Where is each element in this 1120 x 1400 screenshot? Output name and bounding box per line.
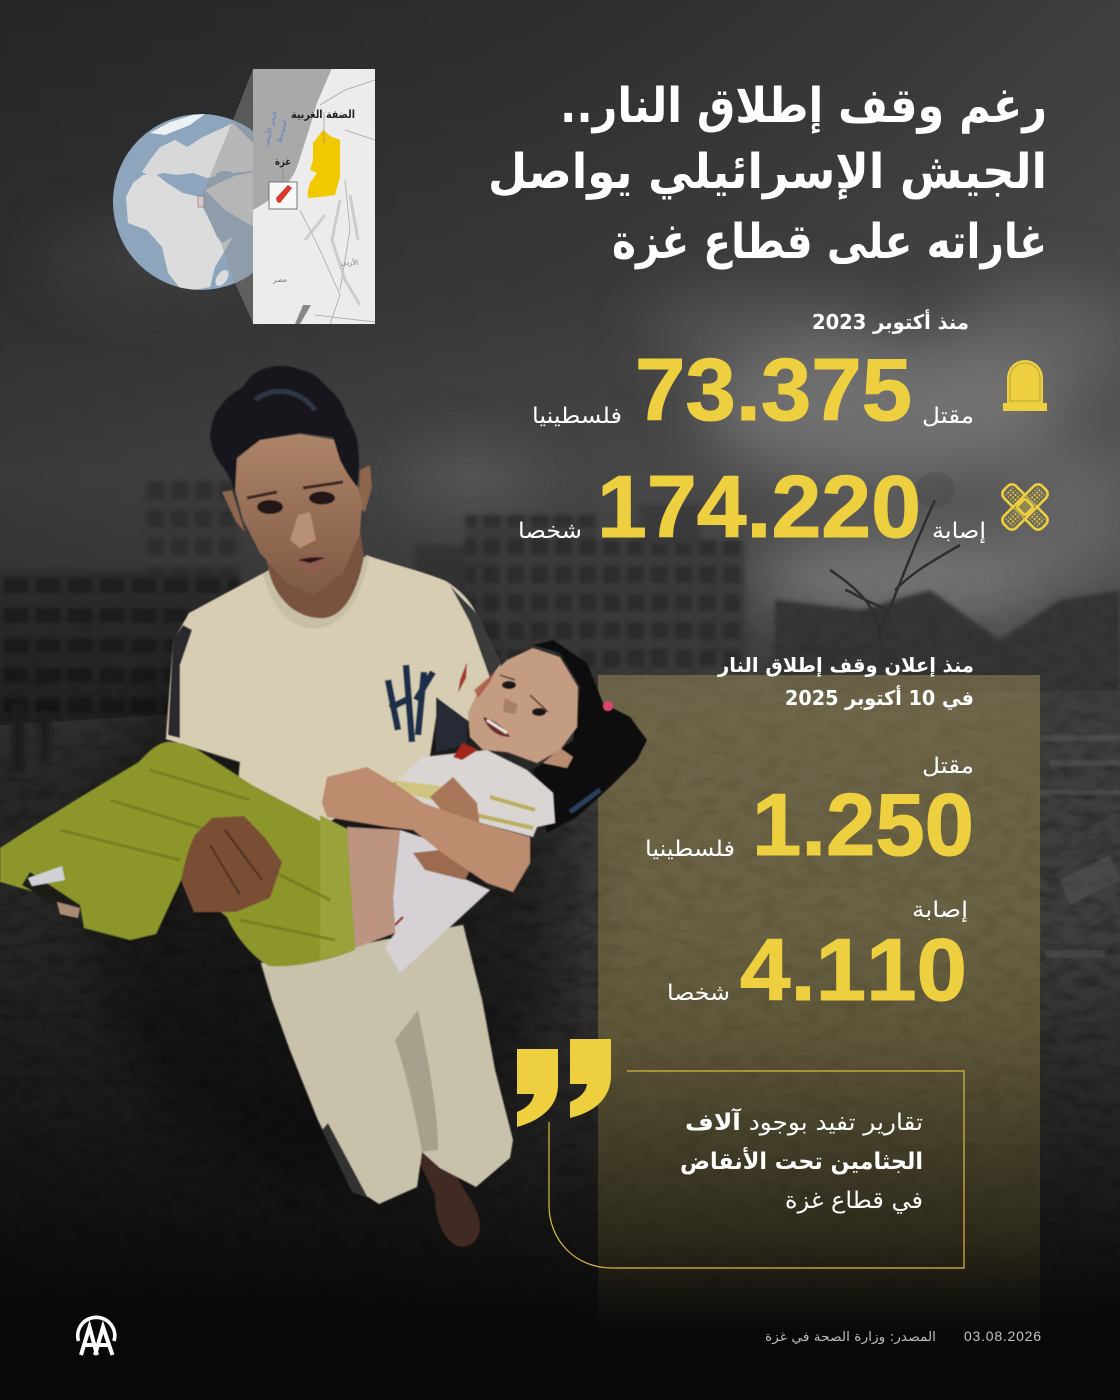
boy neck [262,520,364,618]
boy hand on trousers [181,816,282,912]
inset map: مصر [272,276,287,284]
section label: since ceasefire: منذ إعلان وقف إطلاق النار [717,653,974,677]
logo: AA [78,1317,115,1355]
stat: killed since 2023: فلسطينيا [532,404,622,429]
inset map: البحر الأبيض [261,110,279,147]
stat: wounded since 2023: إصابة [932,519,986,544]
girl forearm [322,767,530,892]
footer: source and date: المصدر: وزارة الصحة في غزة [765,1330,936,1345]
stat: killed since ceasefire: 1.250 [752,775,974,874]
section label: since ceasefire [717,653,974,711]
ground [0,690,1120,1340]
stat: wounded since ceasefire: 4.110 [740,920,967,1019]
inset map: المتوسط [275,118,289,144]
stat: killed since ceasefire [645,754,974,874]
stat: killed since ceasefire: مقتل [922,754,974,779]
boy trousers [261,925,513,1204]
gaza box [269,182,297,209]
stat: wounded since 2023: 174.220 [597,457,921,556]
inset map: الأردن [341,258,358,267]
stat: killed since 2023: 73.375 [635,340,912,439]
locator map: globe and inset [110,68,375,324]
gaza [276,185,292,203]
icon: quotation marks [517,1039,611,1127]
girl head [468,648,578,763]
inset map [253,68,375,324]
boy hand on girl [430,777,480,827]
icon: gravestone [1003,360,1047,411]
footer: source and date [765,1328,1041,1345]
boy head [210,366,372,595]
ruins [0,480,1120,720]
stat: wounded since 2023 [518,457,986,556]
stat: wounded since 2023: شخصا [518,519,582,544]
inset map: الضفة الغربية [291,108,355,121]
photo: boy carrying injured girl [0,366,647,1247]
panel: ceasefire yellow box [598,675,1040,1335]
title: غاراته على قطاع غزة [612,214,1047,270]
title: الجيش الإسرائيلي يواصل [488,144,1047,200]
stat: killed since 2023 [532,340,974,439]
green trousers [0,742,355,966]
girl sleeve and torso [397,750,555,837]
callout: quote box: في قطاع غزة [785,1188,923,1214]
inset map: غزة [275,157,291,168]
title: رغم وقف إطلاق النار.. [560,78,1047,134]
section label: since ceasefire: في 10 أكتوبر 2025 [785,684,974,711]
girl belly [347,827,400,948]
boy left foot [418,1135,480,1247]
callout: quote box: الجثامين تحت الأنقاض [680,1146,923,1175]
girl lower shirt [385,830,490,973]
stat: wounded since ceasefire: إصابة [912,898,968,923]
footer: source and date: 03.08.2026 [964,1328,1041,1344]
girl hair [533,640,647,833]
boy shirt [166,555,501,825]
callout: quote box: تقارير تفيد بوجود آلاف [685,1107,923,1136]
stat: killed since 2023: مقتل [922,404,974,429]
title [488,78,1047,270]
west bank [308,130,340,198]
shirt logo HM [388,665,433,742]
icon: crossed bandages [987,469,1063,545]
callout: quote box [517,1039,964,1268]
globe [113,114,253,290]
section label: since October 2023: منذ أكتوبر 2023 [812,308,969,334]
zoom cone [200,69,253,323]
stat: wounded since ceasefire [667,898,968,1019]
stat: wounded since ceasefire: شخصا [667,981,730,1006]
stat: killed since ceasefire: فلسطينيا [645,837,735,862]
